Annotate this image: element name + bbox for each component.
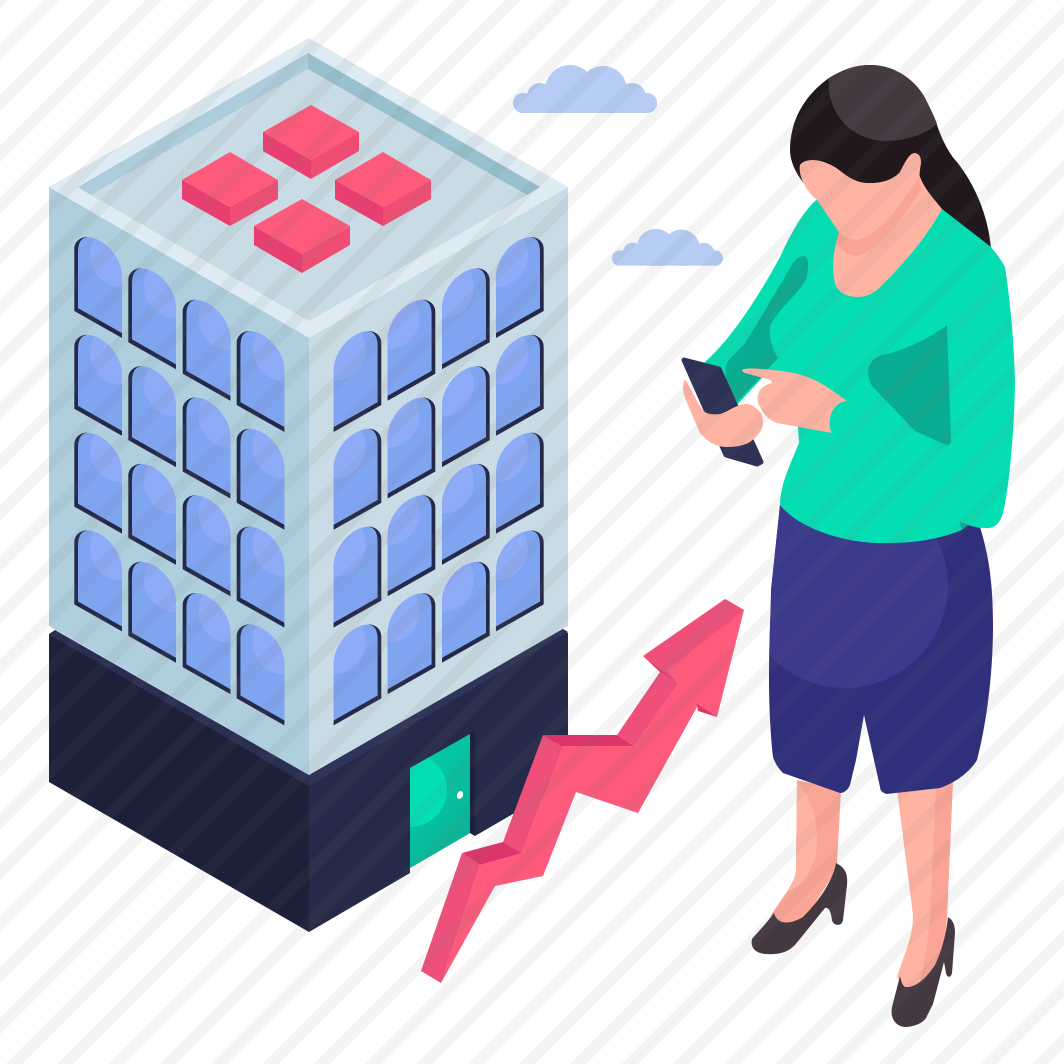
tile bottom bbox=[254, 199, 350, 273]
cloud: small bbox=[612, 229, 723, 267]
cloud: large bbox=[513, 65, 657, 115]
building base bbox=[49, 627, 568, 932]
phone bbox=[684, 360, 761, 464]
door bbox=[410, 730, 475, 868]
sleeve fold shadow bbox=[868, 325, 951, 445]
skirt bbox=[769, 505, 993, 794]
hem fold bbox=[960, 522, 968, 530]
face and neck bbox=[800, 153, 942, 297]
cuff bbox=[830, 401, 850, 433]
holding hand bbox=[683, 379, 763, 447]
tile top bbox=[263, 105, 359, 179]
neck shadow bbox=[836, 177, 921, 256]
roof bbox=[49, 38, 568, 338]
windows: right facade bbox=[302, 223, 544, 725]
blouse bbox=[770, 200, 1015, 543]
pointing hand bbox=[742, 368, 847, 433]
growth arrow bbox=[421, 599, 744, 983]
tile left bbox=[182, 152, 278, 226]
left sleeve bbox=[695, 200, 816, 405]
right leg bbox=[897, 780, 953, 996]
left facade bbox=[49, 187, 309, 775]
arrow shaded steps bbox=[462, 656, 717, 865]
right shoe bbox=[892, 917, 955, 1027]
arrow front bbox=[441, 599, 744, 983]
right facade bbox=[309, 187, 568, 775]
sleeve shadow bbox=[725, 256, 808, 402]
left leg bbox=[771, 780, 841, 932]
building bbox=[49, 38, 568, 932]
arrowhead side bbox=[643, 599, 744, 683]
windows: left facade bbox=[74, 223, 316, 725]
hair bbox=[790, 65, 991, 248]
arrow side bbox=[421, 853, 480, 983]
woman bbox=[683, 65, 1015, 1027]
roof tiles bbox=[182, 105, 431, 273]
tile right bbox=[335, 152, 431, 226]
left shoe bbox=[752, 863, 847, 954]
